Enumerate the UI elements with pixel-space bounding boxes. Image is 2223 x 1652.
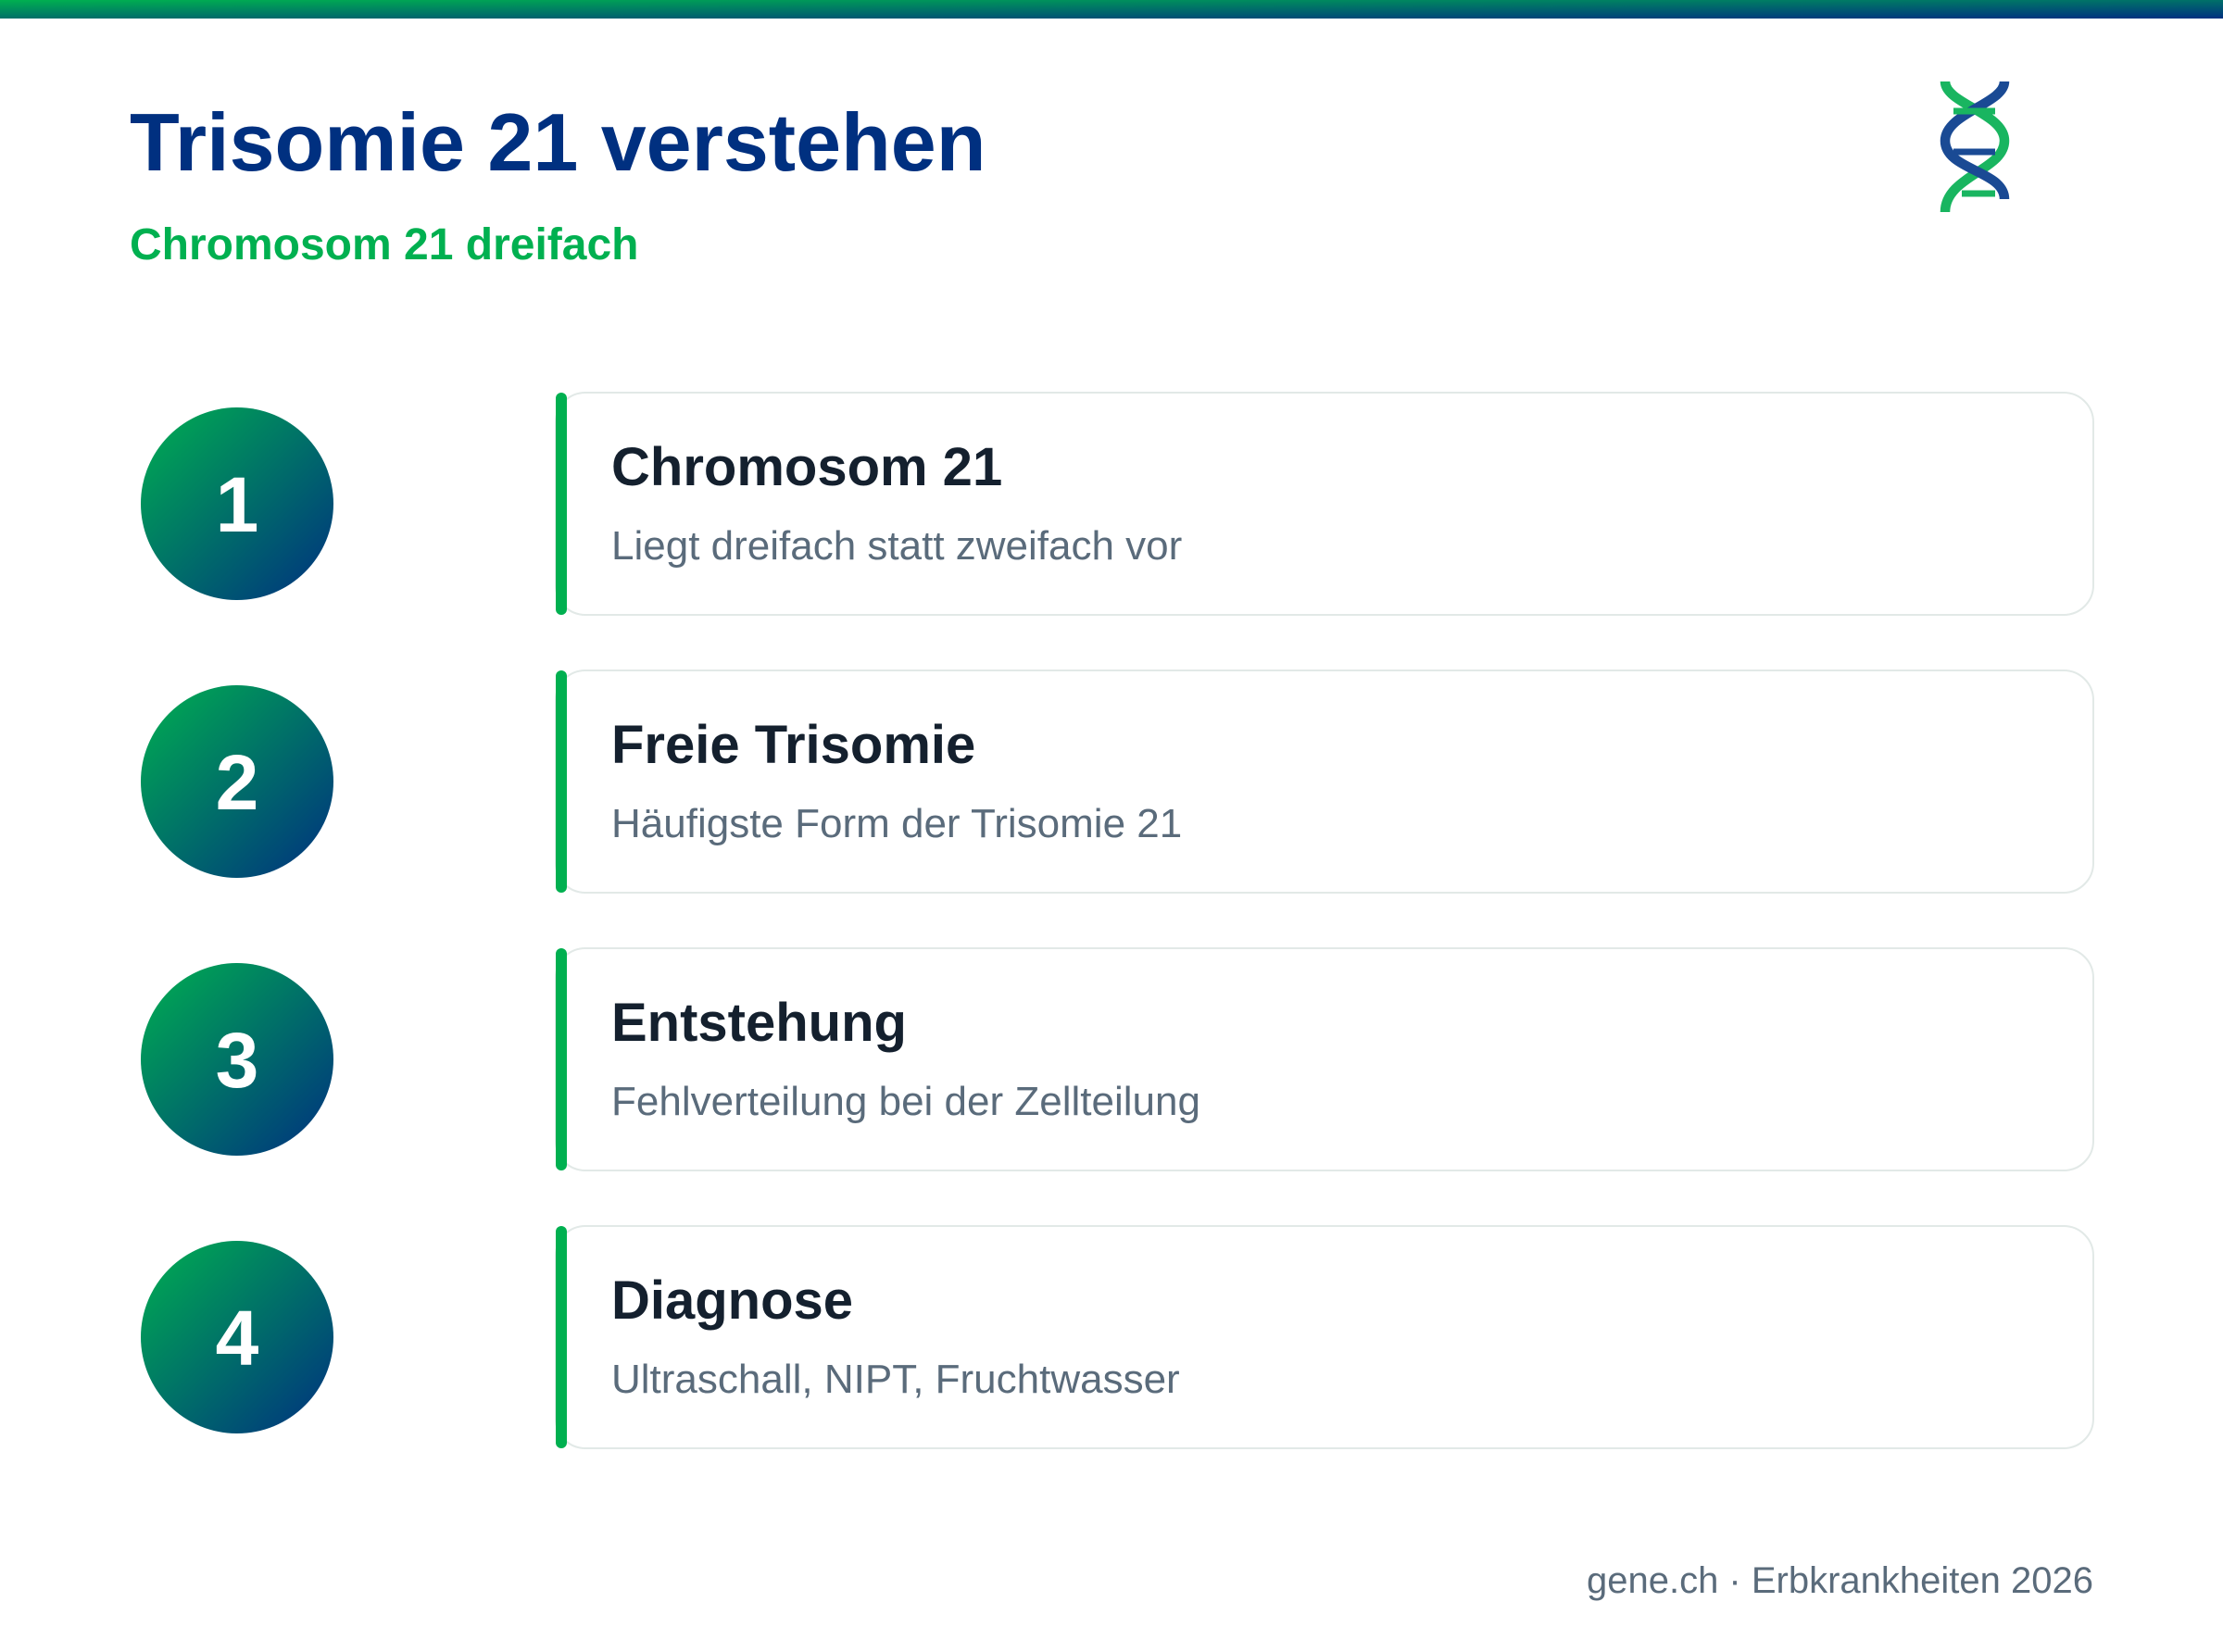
footer: gene.ch · Erbkrankheiten 2026 — [1587, 1560, 2093, 1601]
icon: DNA helix — [1945, 81, 2004, 212]
number badge 1 — [141, 407, 333, 600]
card 1: Chromosom 21 — [611, 437, 1002, 497]
title: Trisomie 21 verstehen — [130, 96, 986, 188]
card 3: Fehlverteilung bei der Zellteilung — [611, 1079, 1200, 1124]
step 2 — [141, 670, 2093, 893]
number badge 4: 4 — [216, 1295, 259, 1382]
card 4: Diagnose — [611, 1270, 853, 1331]
card 2: Häufigste Form der Trisomie 21 — [611, 801, 1182, 846]
step 4 — [141, 1226, 2093, 1448]
number badge 4 — [141, 1241, 333, 1433]
number badge 3: 3 — [216, 1017, 258, 1104]
number badge 1: 1 — [216, 461, 258, 548]
card 2: Freie Trisomie — [611, 715, 975, 775]
card 3 — [556, 948, 2093, 1170]
top gradient bar — [0, 0, 2223, 19]
number badge 3 — [141, 963, 333, 1156]
card 4: Ultraschall, NIPT, Fruchtwasser — [611, 1357, 1180, 1402]
card 4 — [556, 1226, 2093, 1448]
card 2 — [556, 670, 2093, 893]
card 3: Entstehung — [611, 993, 907, 1053]
step 1 — [141, 393, 2093, 615]
subtitle: Chromosom 21 dreifach — [130, 220, 638, 269]
card 1: Liegt dreifach statt zweifach vor — [611, 523, 1182, 569]
step 3 — [141, 948, 2093, 1170]
number badge 2: 2 — [216, 739, 258, 826]
card 1 — [556, 393, 2093, 615]
number badge 2 — [141, 685, 333, 878]
